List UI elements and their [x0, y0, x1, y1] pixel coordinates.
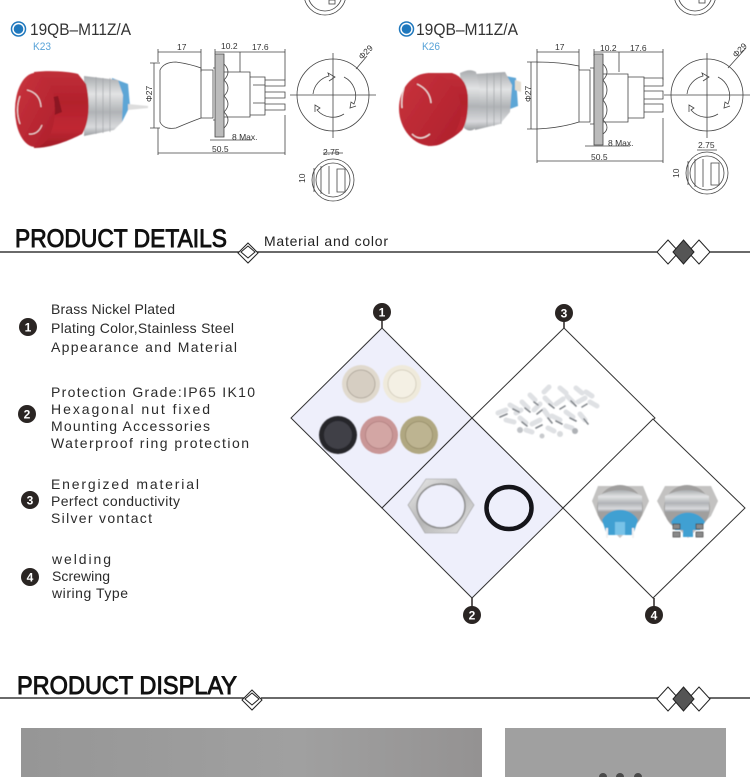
list: features: [18, 301, 255, 601]
technical drawing labels: 50.5: [212, 144, 229, 154]
technical drawing: side view: [527, 49, 663, 163]
badge top 1: [373, 303, 391, 321]
item 2: Mounting Accessories: [51, 418, 210, 434]
heading: PRODUCT DISPLAY: [17, 672, 237, 700]
photo: red mushroom button: [15, 71, 148, 148]
item 1: [19, 301, 237, 355]
photo: red flat button: [395, 70, 521, 149]
badge bottom 2: [463, 606, 481, 624]
welding switch: [592, 485, 649, 538]
caps: [319, 365, 438, 454]
item 4: welding: [51, 551, 111, 567]
item 3: Silver vontact: [51, 510, 152, 526]
technical drawing: cut-off rear view top: [674, 0, 716, 15]
section header: product details: [0, 225, 750, 264]
diamond 1: color caps: [291, 328, 472, 508]
technical drawing labels: 50.5: [591, 152, 608, 162]
item 1: Appearance and Material: [51, 339, 237, 355]
item 2: Hexagonal nut fixed: [51, 401, 210, 417]
technical drawing labels: Φ29: [730, 41, 749, 59]
diamond 4: terminal types: [563, 419, 745, 598]
technical drawing labels: 17.6: [252, 42, 269, 52]
screw terminal switch: [657, 485, 718, 538]
badge 3: [21, 491, 39, 509]
badge 1: 1: [25, 320, 32, 334]
badge 2: 2: [24, 408, 31, 422]
icon: model bullet: [400, 22, 414, 36]
technical drawing: rear view: [686, 150, 728, 194]
technical drawing: front view: [290, 53, 376, 138]
technical drawing labels: 8 Max.: [608, 138, 634, 148]
connectors: [382, 320, 654, 607]
section header: product display: [0, 672, 750, 711]
badge top 3: [555, 304, 573, 322]
icon: triple diamonds: [657, 687, 710, 711]
badge 1: [19, 318, 37, 336]
technical drawing: rear view: [312, 153, 354, 201]
diamond 3: silver contacts: [472, 328, 655, 508]
badge bottom 4: 4: [651, 608, 658, 622]
technical drawing labels: 17: [177, 42, 187, 52]
panel: product K23: [12, 0, 376, 201]
technical drawing labels: Φ27: [144, 85, 154, 102]
hex nut: [408, 479, 474, 533]
badge 4: 4: [27, 570, 34, 584]
technical drawing labels: [523, 41, 749, 178]
technical drawing labels: 10.2: [600, 43, 617, 53]
technical drawing labels: 17.6: [630, 43, 647, 53]
badge top 3: 3: [561, 306, 568, 320]
o-ring: [486, 487, 532, 529]
item 3: Energized material: [51, 476, 199, 492]
item 3: [21, 476, 199, 526]
silver rivets: [498, 387, 597, 438]
model code: K23: [33, 41, 51, 53]
technical drawing labels: 10.2: [221, 41, 238, 51]
panel: product K26: [395, 0, 750, 194]
photo: display right: [505, 728, 726, 777]
item 4: Screwing: [52, 568, 110, 584]
badge 3: 3: [27, 494, 34, 508]
icon: small diamond: [238, 243, 258, 263]
subheading: Material and color: [264, 233, 388, 249]
technical drawing: side view: [150, 49, 285, 155]
heading: PRODUCT DETAILS: [15, 225, 227, 253]
item 1: Plating Color,Stainless Steel: [51, 320, 234, 336]
icon: model bullet: [12, 22, 26, 36]
technical drawing labels: Φ29: [356, 43, 375, 61]
item 3: Perfect conductivity: [51, 493, 180, 509]
photo: display left: [21, 728, 482, 777]
item 2: [18, 384, 255, 451]
item 4: [21, 551, 128, 601]
technical drawing labels: Φ27: [523, 85, 533, 102]
technical drawing: front view: [664, 48, 750, 138]
technical drawing: cut-off rear view top: [304, 0, 346, 15]
item 1: Brass Nickel Plated: [51, 301, 175, 317]
item 2: Waterproof ring protection: [51, 435, 249, 451]
diamond 2: nut and ring: [382, 418, 563, 598]
badge top 1: 1: [379, 306, 386, 320]
technical drawing labels: 2.75: [698, 140, 715, 150]
item 4: wiring Type: [51, 585, 128, 601]
badge bottom 2: 2: [469, 608, 476, 622]
technical drawing labels: 10: [297, 173, 307, 183]
technical drawing labels: 2.75: [323, 147, 340, 157]
icon: small diamond: [242, 690, 262, 710]
icon: triple diamonds: [657, 240, 710, 264]
model name: 19QB–M11Z/A: [416, 20, 519, 39]
model code: K26: [422, 41, 440, 53]
technical drawing labels: 10: [671, 168, 681, 178]
technical drawing labels: 8 Max.: [232, 132, 258, 142]
badge bottom 4: [645, 606, 663, 624]
diagram: four diamonds: [291, 303, 745, 624]
technical drawing labels: 17: [555, 42, 565, 52]
technical drawing labels: [144, 41, 375, 183]
item 2: Protection Grade:IP65 IK10: [51, 384, 255, 400]
badge 2: [18, 405, 36, 423]
model name: 19QB–M11Z/A: [30, 20, 132, 39]
